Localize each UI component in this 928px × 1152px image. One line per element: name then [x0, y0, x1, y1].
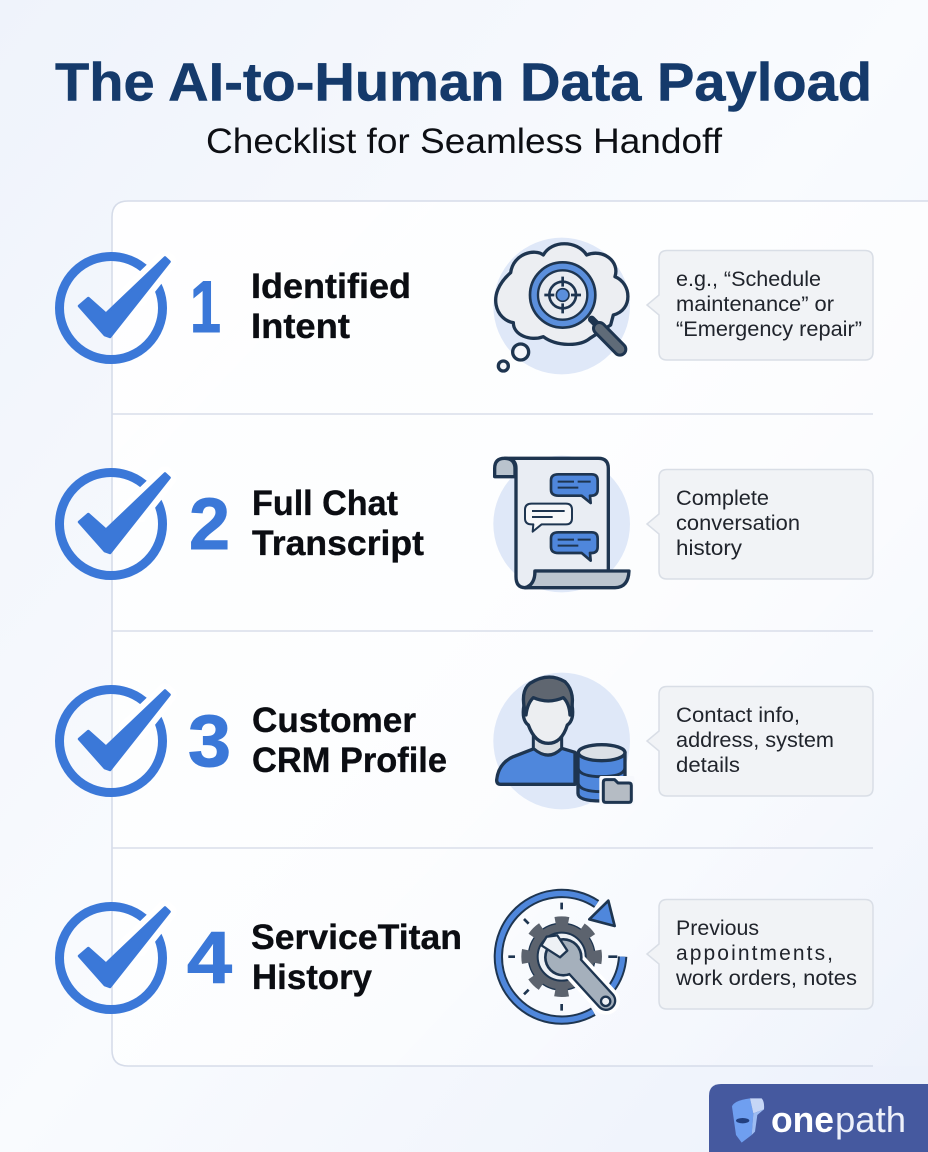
- number 2: 2: [189, 484, 230, 565]
- icon: thought cloud with magnifier: [493, 238, 630, 374]
- callout: servicetitan history: appointments,: [676, 942, 833, 965]
- heading: identified intent: Intent: [251, 307, 350, 346]
- icon: check mark 1: [60, 256, 169, 360]
- heading: servicetitan history: [251, 918, 462, 997]
- heading: identified intent: Identified: [251, 267, 411, 306]
- callout: customer crm profile: [647, 686, 873, 796]
- callout: customer crm profile: Contact info,: [676, 704, 800, 727]
- callout: full chat transcript: conversation: [676, 512, 800, 535]
- heading: customer crm profile: [252, 701, 447, 780]
- callout: identified intent: e.g., “Schedule: [676, 268, 821, 291]
- logo wordmark: [771, 1099, 906, 1140]
- heading: full chat transcript: Full Chat: [252, 484, 398, 523]
- number 3: 3: [188, 701, 231, 782]
- callout: identified intent: maintenance” or: [676, 293, 834, 316]
- heading: customer crm profile: Customer: [252, 701, 416, 740]
- callout: full chat transcript: history: [676, 537, 743, 560]
- icon: person with database: [493, 673, 634, 809]
- row 3: customer crm profile: [60, 673, 873, 809]
- icon: gear and wrench history: [498, 893, 623, 1020]
- callout: customer crm profile: details: [676, 754, 740, 777]
- logo wordmark: one: [771, 1099, 834, 1140]
- wrench: [541, 935, 610, 1006]
- icon: chat transcript scroll: [493, 456, 630, 592]
- callout: servicetitan history: Previous: [676, 917, 759, 940]
- heading: servicetitan history: ServiceTitan: [251, 918, 462, 957]
- callout: servicetitan history: [647, 900, 873, 1009]
- icon: onepath logo mark: [732, 1098, 764, 1143]
- callout: full chat transcript: Complete: [676, 487, 769, 510]
- heading: servicetitan history: History: [252, 958, 373, 997]
- panel: checklist card: [112, 201, 928, 1066]
- number 1: 1: [190, 267, 221, 348]
- heading: customer crm profile: CRM Profile: [252, 741, 447, 780]
- callout: full chat transcript: [647, 470, 873, 579]
- icon: check mark 2: [60, 472, 169, 576]
- icon: check mark 4: [60, 906, 169, 1010]
- row 4: servicetitan history: [60, 893, 873, 1020]
- icon: check mark 3: [60, 690, 169, 792]
- logo wordmark: path: [835, 1099, 906, 1140]
- heading: identified intent: [251, 267, 411, 346]
- heading: full chat transcript: Transcript: [252, 524, 424, 563]
- subtitle: Checklist for Seamless Handoff: [206, 122, 722, 161]
- callout: identified intent: “Emergency repair”: [676, 318, 862, 341]
- row 1: identified intent: [60, 238, 873, 374]
- callout: servicetitan history: work orders, notes: [675, 967, 857, 990]
- heading: full chat transcript: [252, 484, 424, 563]
- callout: identified intent: [647, 250, 873, 360]
- row 2: full chat transcript: [60, 456, 873, 592]
- logo badge: [709, 1084, 928, 1152]
- callout: customer crm profile: address, system: [676, 729, 834, 752]
- title: The AI-to-Human Data Payload: [55, 52, 872, 112]
- number 4: 4: [187, 918, 232, 999]
